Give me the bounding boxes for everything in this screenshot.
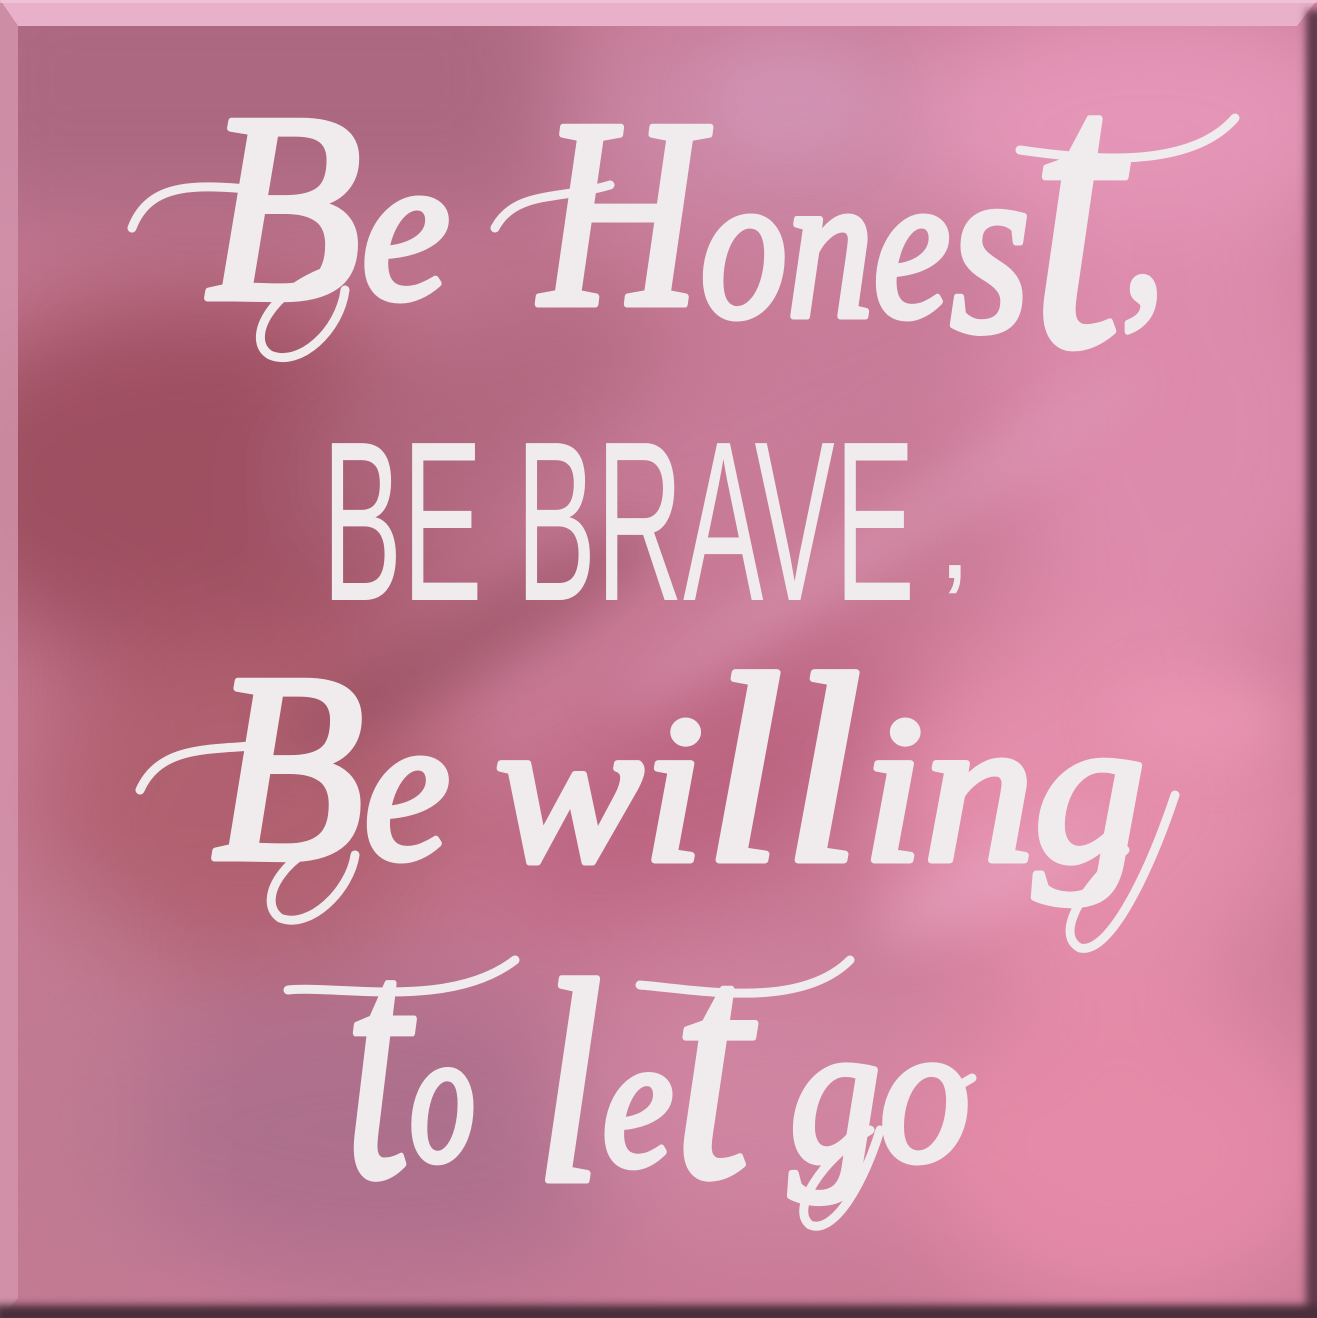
- line: Be Honest,: Be: [205, 58, 450, 357]
- line: to let go: [345, 872, 970, 1249]
- line: to let go: l: [535, 922, 616, 1243]
- line: Be willing: willing: [495, 620, 1145, 919]
- line: Be Honest,: t: [1030, 0, 1133, 431]
- line: to let go: o: [410, 992, 475, 1202]
- line: Be Honest,: ,: [1122, 113, 1165, 345]
- quote text: [205, 0, 1165, 1249]
- line: to let go: e: [603, 997, 673, 1207]
- line: Be Honest,: one: [701, 130, 950, 362]
- line: Be Honest,: [205, 0, 1165, 431]
- line: to let go: t: [345, 872, 439, 1249]
- line: to let go: t: [673, 882, 760, 1247]
- line: Be willing: Be: [212, 618, 450, 917]
- line: BE BRAVE,: ,: [938, 470, 971, 604]
- line: BE BRAVE,: [322, 395, 971, 649]
- line: Be Honest,: H: [540, 64, 735, 363]
- line: Be Honest,: s: [950, 108, 1030, 385]
- decorative swashes: [132, 118, 1235, 1226]
- line: Be willing: [212, 618, 1145, 919]
- line: to let go: go: [790, 983, 970, 1204]
